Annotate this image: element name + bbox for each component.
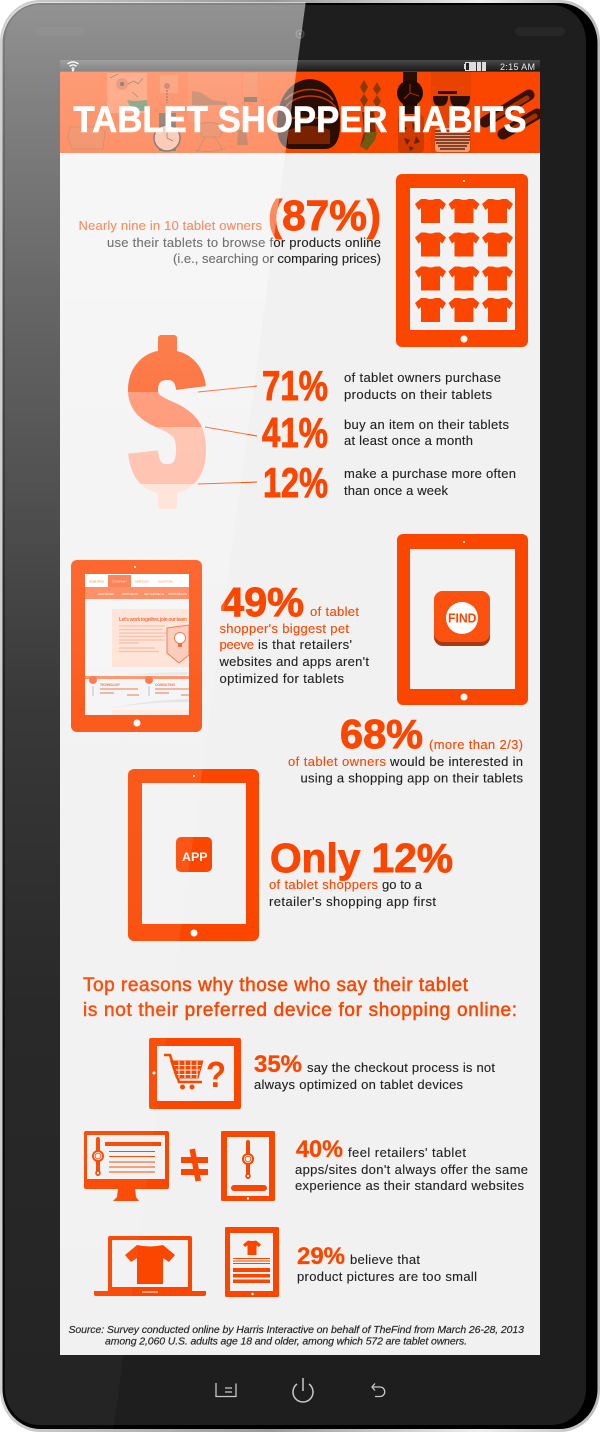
watch: [242, 1140, 254, 1179]
website mockup: WHO WE ARE: [98, 592, 114, 596]
heading: top reasons: Top reasons why those who say their tablet: [83, 975, 469, 996]
stat: 68%: would be interested in: [389, 754, 523, 769]
stat: 49%: is that retailers': [258, 637, 352, 652]
watch: [92, 1137, 104, 1176]
icon: tablet with cart: [149, 1038, 241, 1109]
status bar: [60, 60, 540, 72]
icon: dollar sign: [143, 335, 191, 509]
screen glare: [2, 2, 306, 1289]
icon: tablet with FIND app: [397, 534, 528, 705]
stat: 49%: shopper's biggest pet: [220, 621, 349, 636]
icon: menu button: [216, 1383, 236, 1396]
website mockup: TECHNOLOGY: [100, 683, 121, 687]
stat: 71%: 71%: [262, 362, 328, 409]
icon: power button: [293, 1378, 313, 1402]
screen panel: [60, 72, 540, 1355]
icon: laptop with shirt: [94, 1236, 206, 1296]
stat: 71%: [262, 362, 501, 409]
banner objects right: [277, 72, 537, 153]
stat: 41%: at least once a month: [344, 433, 473, 448]
icon: tablet with small picture: [225, 1227, 279, 1297]
banner: [60, 72, 540, 153]
stat: 71%: products on their tablets: [344, 387, 492, 402]
speaker left: [34, 27, 84, 36]
website mockup: COMPANY: [112, 580, 127, 584]
icon: tablet with APP: [128, 769, 259, 941]
icon: monitor with watch: [84, 1131, 169, 1201]
stat: 12%: make a purchase more often: [344, 466, 516, 481]
stat: only 12%: [269, 835, 453, 909]
stat: 40%: experience as their standard websites: [295, 1178, 524, 1193]
source note: among 2,060 U.S. adults age 18 and older, among which 572 are tablet owners.: [105, 1336, 467, 1348]
icon: battery: [464, 62, 486, 71]
shirt: [125, 1245, 175, 1284]
website mockup: [85, 574, 189, 715]
website mockup: WHAT WE DO: [122, 592, 138, 596]
website mockup: TESTIMONIALS: [168, 592, 187, 596]
stat: 40%: feel retailers' tablet: [348, 1145, 466, 1160]
stat: 12%: 12%: [263, 459, 328, 506]
heading: top reasons: is not their preferred device for shopping online:: [83, 1000, 517, 1021]
connector lines: [198, 386, 257, 484]
stat: 35%: always optimized on tablet devices: [254, 1077, 464, 1092]
banner objects left: [68, 72, 257, 152]
stat: 49%: optimized for tablets: [220, 671, 344, 686]
stat: 12%: [263, 459, 516, 506]
icon: FIND app: FIND: [448, 612, 476, 626]
stat: 49%: of tablet: [310, 604, 359, 619]
stat: 71%: of tablet owners purchase: [344, 370, 501, 385]
stat: 29%: 29%: [297, 1243, 345, 1270]
stat: 87% browse: (87%): [268, 192, 381, 240]
stat: 49%: 49%: [221, 579, 304, 625]
website mockup: HOME PAGE: [89, 580, 104, 584]
stat: 68%: (more than 2/3): [429, 737, 523, 752]
shirts grid: [415, 199, 513, 322]
clock: 2:15 AM: [500, 62, 535, 72]
stat: 87% browse: (i.e., searching or comparing prices): [173, 251, 381, 266]
stat: 41%: [262, 409, 510, 456]
stat: 49%: [218, 579, 369, 686]
question mark: ?: [206, 1054, 226, 1095]
stat: 35%: say the checkout process is not: [307, 1060, 495, 1075]
stat: 12%: than once a week: [344, 483, 448, 498]
stat: only 12%: retailer's shopping app first: [269, 894, 436, 909]
icon: APP button: APP: [182, 850, 208, 864]
stat: 68%: of tablet owners: [288, 754, 386, 769]
icon: tablet with watch: [221, 1131, 275, 1201]
stat: 41%: 41%: [262, 409, 328, 456]
stat: 49%: websites and apps aren't: [218, 654, 369, 669]
stat: only 12%: go to a: [382, 877, 423, 892]
website mockup: WHY CHOOSE US: [144, 592, 164, 596]
icon: FIND app: [434, 591, 490, 646]
icon: tablet with shirts: [396, 174, 528, 347]
stat: 49%: peeve: [220, 637, 254, 652]
stat: 40%: apps/sites don't always offer the same: [295, 1162, 528, 1177]
stat: only 12%: Only 12%: [270, 835, 453, 881]
cart: [164, 1055, 204, 1090]
stat: 68%: [288, 711, 524, 786]
stat: 41%: buy an item on their tablets: [344, 417, 510, 432]
small shirt: [243, 1240, 261, 1255]
speaker right: [515, 27, 565, 36]
title: TABLET SHOPPER HABITS: [74, 98, 526, 140]
not equal sign: [181, 1148, 208, 1182]
source note: Source: Survey conducted online by Harris Interactive on behalf of TheFind from March 26-28, 2013: [68, 1324, 524, 1336]
camera: [296, 30, 304, 38]
icon: back button: [372, 1384, 385, 1396]
website mockup: Let's work together, join our team: [119, 617, 188, 623]
stat: 35%: 35%: [254, 1051, 302, 1078]
stat: 68%: 68%: [340, 711, 423, 757]
icon: APP button: [176, 837, 212, 872]
stat: 87% browse: Nearly nine in 10 tablet owners: [78, 218, 262, 233]
stat: only 12%: of tablet shoppers: [269, 877, 378, 892]
stat: 29%: believe that: [350, 1252, 420, 1267]
icon: wifi: [68, 62, 78, 71]
website mockup: CONSULTING: [155, 683, 176, 687]
stat: 87% browse: [78, 192, 381, 266]
website mockup: SOLUTIONS: [158, 580, 173, 584]
stat: 29%: [297, 1243, 477, 1284]
icon: tablet with website: [71, 560, 202, 732]
stat: 40%: 40%: [296, 1136, 343, 1163]
stat: 35%: [254, 1051, 495, 1092]
stat: 29%: product pictures are too small: [297, 1269, 477, 1284]
source note: [68, 1324, 524, 1348]
stat: 40%: [295, 1136, 528, 1193]
heading: top reasons: [83, 975, 517, 1021]
stat: 68%: using a shopping app on their tablets: [300, 770, 524, 786]
website mockup: SERVICES: [135, 580, 149, 584]
stat: 87% browse: use their tablets to browse for products online: [107, 235, 381, 250]
